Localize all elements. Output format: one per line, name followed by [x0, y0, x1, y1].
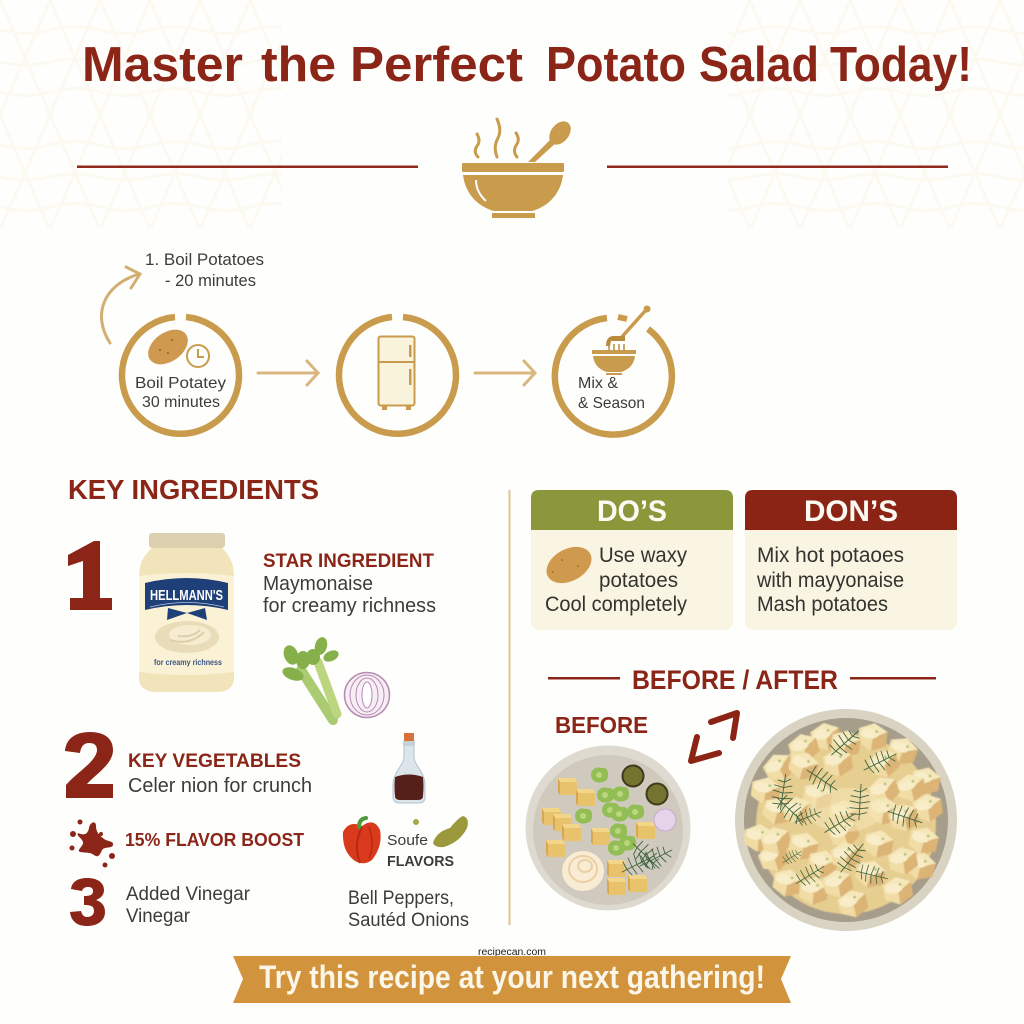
icon: potato	[142, 323, 194, 371]
icon: mayonnaise jar: HELLMANN'S	[150, 587, 223, 604]
key vegetables text	[128, 751, 312, 797]
title: Today!	[830, 38, 972, 92]
step 1: boil potatoes	[122, 317, 239, 434]
decorative pattern: top right	[728, 0, 1024, 228]
bowl: finished potato salad	[735, 709, 957, 931]
key vegetables text: Celer nion for crunch	[128, 775, 312, 797]
step 3 label: Mix &	[578, 375, 618, 392]
heading: before / after: BEFORE / AFTER	[632, 665, 838, 695]
added vinegar text: Added Vinegar	[126, 884, 251, 905]
banner: call to action	[233, 956, 791, 1003]
icon: before-after arrows	[691, 713, 737, 761]
potato cubes	[743, 721, 944, 921]
bell peppers and onions text: Bell Peppers,	[348, 888, 454, 909]
mayonnaise dollop	[562, 851, 604, 891]
step 1 label: 30 minutes	[142, 394, 220, 411]
step note	[145, 250, 264, 290]
numeral 3	[70, 878, 105, 926]
icon: mayonnaise jar: for creamy richness	[154, 657, 222, 667]
icon: celery	[281, 636, 340, 720]
star ingredient text: STAR INGREDIENT	[263, 551, 434, 572]
arrow: step 1 to step 2	[258, 361, 318, 385]
step 1 label: Boil Potatey	[135, 375, 226, 392]
do's list: Cool completely	[545, 593, 687, 616]
vertical divider	[508, 490, 510, 925]
plate: separate ingredients	[526, 746, 690, 910]
souffle flavors label: Soufe	[387, 832, 428, 849]
icon: mayonnaise jar	[139, 533, 234, 692]
key vegetables text: KEY VEGETABLES	[128, 751, 301, 772]
star ingredient text: for creamy richness	[263, 595, 436, 617]
onion slice	[654, 809, 676, 831]
source credit: recipecan.com	[478, 947, 546, 958]
panel: do's: DO’S	[597, 495, 667, 528]
step 3 label: & Season	[578, 395, 645, 412]
added vinegar text	[126, 884, 251, 927]
icon: pickle	[413, 816, 468, 847]
step 2: chill in fridge	[339, 317, 456, 434]
icon: bowl with spoon and steam	[462, 117, 575, 218]
star ingredient text	[263, 551, 436, 617]
title	[82, 38, 972, 92]
decorative pattern: top left	[0, 0, 282, 228]
numeral 2	[65, 732, 113, 798]
do's list	[545, 544, 687, 616]
header divider right	[607, 166, 948, 168]
bell peppers and onions text	[348, 888, 469, 931]
don'ts list	[756, 544, 904, 616]
banner: call to action: Try this recipe at your next gathering!	[259, 959, 765, 995]
icon: fridge	[378, 336, 415, 410]
step note: 1. Boil Potatoes	[145, 250, 264, 269]
panel: do's	[531, 490, 733, 630]
title: Potato	[546, 38, 686, 92]
don'ts list: Mix hot potaoes	[757, 544, 904, 567]
icon: onion	[344, 672, 390, 718]
heading: key ingredients: KEY INGREDIENTS	[68, 474, 319, 505]
icon: vinegar splash	[70, 820, 115, 868]
star ingredient text: Maymonaise	[263, 573, 373, 595]
icon: clock	[187, 345, 209, 367]
title: Salad	[699, 38, 819, 92]
arrow: step 2 to step 3	[475, 361, 535, 385]
curved arrow to step note	[101, 267, 140, 343]
panel: don'ts	[745, 490, 957, 630]
pickle slices	[622, 766, 668, 804]
step 3: mix and season	[555, 306, 672, 435]
dill garnish	[765, 728, 924, 892]
title: Perfect	[350, 38, 523, 92]
flavor boost callout: 15% FLAVOR BOOST	[125, 830, 304, 850]
panel: don'ts: DON’S	[804, 495, 898, 528]
don'ts list: with mayyonaise	[756, 569, 904, 592]
step note: - 20 minutes	[165, 271, 256, 290]
added vinegar text: Vinegar	[126, 906, 191, 927]
icon: vinegar bottle	[393, 733, 425, 803]
chopped celery	[575, 767, 644, 856]
do's list: Use waxy	[599, 544, 687, 567]
title: Master	[82, 38, 243, 92]
bell peppers and onions text: Sautéd Onions	[348, 910, 469, 931]
souffle flavors label: FLAVORS	[387, 853, 454, 870]
don'ts list: Mash potatoes	[757, 593, 888, 616]
do's list: potatoes	[599, 569, 678, 592]
before label: BEFORE	[555, 712, 648, 738]
souffle flavors label	[387, 832, 454, 870]
step 3 label	[578, 375, 645, 412]
raw potato cubes	[542, 778, 655, 895]
icon: bell pepper	[343, 818, 381, 863]
step 1 label	[135, 375, 226, 411]
icon: potato	[540, 540, 598, 590]
dill sprigs	[622, 837, 672, 875]
header divider left	[77, 166, 418, 168]
title: the	[261, 38, 336, 92]
numeral 1	[68, 541, 112, 610]
icon: mixing bowl	[592, 306, 650, 375]
